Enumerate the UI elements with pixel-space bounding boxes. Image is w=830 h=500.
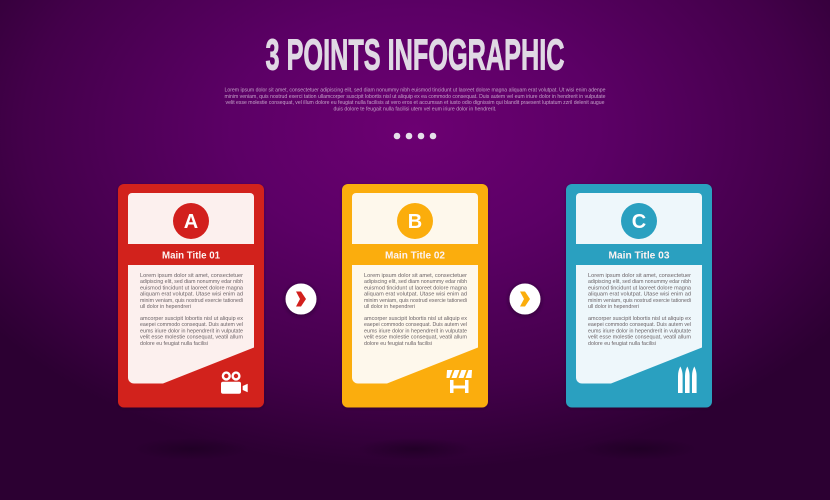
- body text C: minim veniam, quis nostrud exercie tationedi: [588, 298, 691, 304]
- body text B: velit esse molestie consequat, veatil allum: [364, 335, 467, 341]
- body panel A: [128, 265, 254, 384]
- title: 3 POINTS INFOGRAPHIC: [266, 32, 564, 80]
- body text B: Lorem ipsum dolor sit amet, consectetuer: [364, 273, 467, 279]
- body text B: ull dolor in hependreri: [364, 304, 415, 310]
- body text C: euismod tincidunt ut laoreet dolore magna: [588, 285, 691, 291]
- body text A: adipiscing elit, sed diam nonummy edar nibh: [140, 279, 243, 285]
- body text B: dolore eu feugiat nulla facilisi: [364, 341, 432, 347]
- body text A: euismod tincidunt ut laoreet dolore magna: [140, 285, 243, 291]
- icon: three bullets: [678, 366, 697, 393]
- arrow: A to B: [286, 284, 316, 314]
- badge C: C: [632, 211, 646, 233]
- body text B: minim veniam, quis nostrud exercie tationedi: [364, 298, 467, 304]
- body text B: [364, 273, 467, 347]
- panel: card A: [118, 184, 264, 408]
- body text A: minim veniam, quis nostrud exercie tationedi: [140, 298, 243, 304]
- intro text block: [224, 88, 606, 112]
- heading: Main Title 01: Main Title 01: [162, 250, 220, 262]
- badge A: [173, 203, 209, 239]
- body text A: eaepei commodo consequat. Duis autem vel: [140, 322, 243, 328]
- body text A: ull dolor in hependreri: [140, 304, 191, 310]
- floor shadow: card A: [133, 438, 249, 460]
- icon: market stall: [446, 370, 472, 393]
- body text A: dolore eu feugiat nulla facilisi: [140, 341, 208, 347]
- body text B: adipiscing elit, sed diam nonummy edar nibh: [364, 279, 467, 285]
- body text A: amcorper suscipit lobortis nisl ut aliquip ex: [140, 316, 243, 322]
- badge B: B: [408, 211, 422, 233]
- heading: Main Title 03: Main Title 03: [608, 250, 670, 262]
- body text C: eaepei commodo consequat. Duis autem vel: [588, 322, 691, 328]
- body text C: amcorper suscipit lobortis nisl ut aliquip ex: [588, 316, 691, 322]
- panel: card C: [566, 184, 712, 408]
- body text C: dolore eu feugiat nulla facilisi: [588, 341, 656, 347]
- body text C: Lorem ipsum dolor sit amet, consectetuer: [588, 273, 691, 279]
- icon: video camera: [221, 373, 248, 394]
- body text C: ull dolor in hependreri: [588, 304, 639, 310]
- body text C: velit esse molestie consequat, veatil allum: [588, 335, 691, 341]
- body text A: velit esse molestie consequat, veatil allum: [140, 335, 243, 341]
- body panel B: [352, 265, 478, 384]
- body panel C: [576, 265, 702, 384]
- body text B: aliquam erat volutpat. Utase wisi enim ad: [364, 292, 467, 298]
- badge C: [621, 203, 657, 239]
- body text C: [588, 273, 691, 347]
- badge B: [397, 203, 433, 239]
- body text A: [140, 273, 243, 347]
- heading: Main Title 02: Main Title 02: [385, 250, 445, 262]
- body text C: eums iriure dolor in hependrerit in vulputate: [588, 328, 691, 334]
- body text A: eums iriure dolor in hependrerit in vulputate: [140, 328, 243, 334]
- body text B: euismod tincidunt ut laoreet dolore magna: [364, 285, 467, 291]
- intro text block: Lorem ipsum dolor sit amet, consectetuer adipiscing elit, sed diam nonummy nibh euismod tincidunt ut laoreet dolore magna aliquam erat volutpat. Ut wisi enim adenpe: [224, 88, 606, 94]
- body text A: Lorem ipsum dolor sit amet, consectetuer: [140, 273, 243, 279]
- badge A: A: [184, 211, 198, 233]
- panel: card B: [342, 184, 488, 408]
- body text B: eaepei commodo consequat. Duis autem vel: [364, 322, 467, 328]
- dots: [394, 133, 436, 139]
- floor shadow: card C: [581, 438, 697, 460]
- arrow: B to C: [510, 284, 540, 314]
- intro text block: minim veniam, quis nostrud exerci tation ullamcorper suscipit lobortis nisl ut aliquip ex ea commodo consequat. Duis autem vel eum iriure dolor in hendrerit in vulputate: [224, 94, 606, 100]
- intro text block: duis dolore te feugait nulla facilisi utem vel eum iriure dolor in hendrerit.: [334, 106, 496, 112]
- body text B: amcorper suscipit lobortis nisl ut aliquip ex: [364, 316, 467, 322]
- intro text block: velit esse molestie consequat, vel illum dolore eu feugiat nulla facilisis at vero eros et accumsan et iusto odio dignissim qui blandit praesent luptatum zzril delenit augue: [226, 100, 605, 106]
- body text C: adipiscing elit, sed diam nonummy edar nibh: [588, 279, 691, 285]
- floor shadow: card B: [357, 438, 473, 460]
- body text B: eums iriure dolor in hependrerit in vulputate: [364, 328, 467, 334]
- body text C: aliquam erat volutpat. Utase wisi enim ad: [588, 292, 691, 298]
- body text A: aliquam erat volutpat. Utase wisi enim ad: [140, 292, 243, 298]
